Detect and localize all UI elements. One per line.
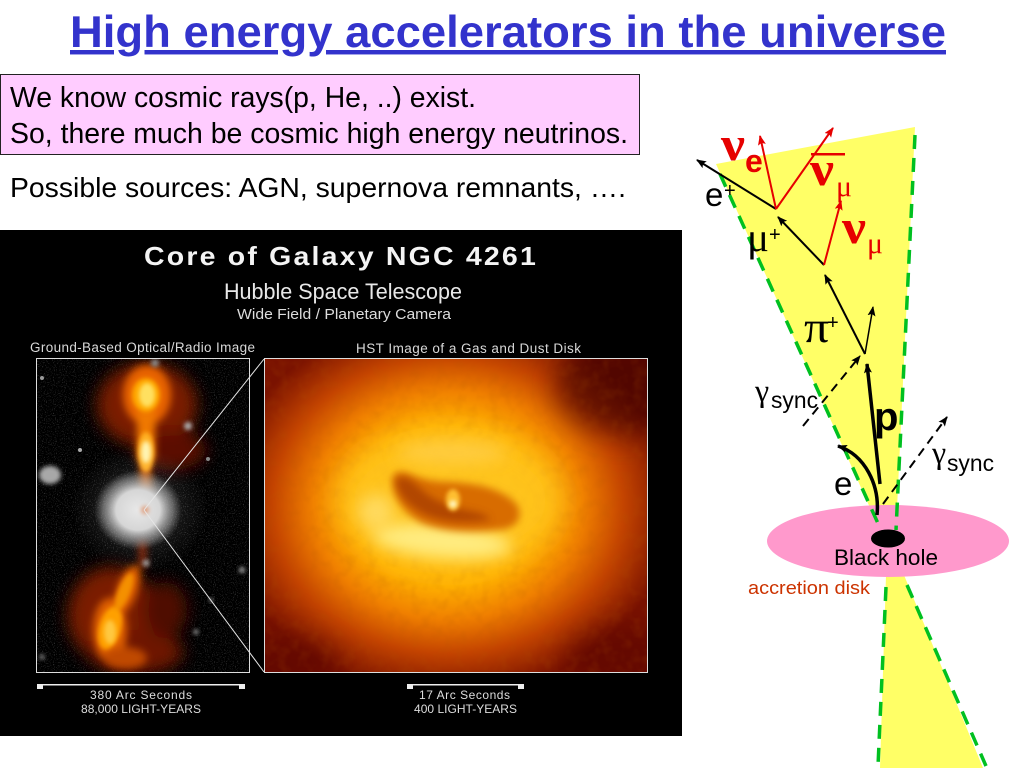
label: muon neutrino	[841, 201, 883, 260]
arrow: muon	[778, 217, 824, 265]
arrow: anti muon neutrino	[776, 128, 833, 209]
arrow: gamma sync left	[803, 356, 860, 426]
left panel caption: Ground-Based Optical/Radio Image	[30, 340, 255, 355]
image heading: Core of Galaxy NGC 4261	[144, 241, 538, 271]
label: anti muon neutrino: ν	[809, 143, 834, 196]
title: High energy accelerators in the universe	[70, 8, 946, 57]
arrow: secondary	[865, 307, 873, 354]
label: muon: +	[769, 224, 781, 246]
label: electron neutrino: ν	[720, 118, 745, 171]
label: muon neutrino: ν	[841, 201, 866, 254]
upper jet cone	[716, 127, 915, 530]
scale bar: left	[37, 684, 245, 716]
zoom lines	[144, 359, 264, 672]
panel: NGC 4261 image	[0, 230, 695, 736]
label: gamma sync left	[754, 372, 818, 413]
arrow: proton	[867, 364, 880, 484]
arrow: muon neutrino	[824, 201, 841, 265]
label: anti muon neutrino	[809, 143, 852, 203]
scale bar: right	[407, 684, 524, 716]
image subheading: Hubble Space Telescope	[224, 279, 462, 304]
callout: cosmic rays statement: So, there much be cosmic high energy neutrinos.	[10, 118, 628, 150]
label: gamma sync right: γ	[931, 434, 946, 470]
lower jet cone	[880, 575, 983, 768]
label: electron neutrino	[720, 118, 763, 179]
label: electron neutrino: e	[745, 143, 763, 179]
accretion disk label: accretion disk	[748, 577, 871, 598]
black hole label: Black hole	[834, 545, 938, 570]
scale bar: right: 17 Arc Seconds	[419, 688, 510, 702]
right panel caption: HST Image of a Gas and Dust Disk	[356, 341, 581, 356]
label: gamma sync left: sync	[771, 387, 818, 413]
label: pion	[804, 303, 839, 352]
callout: cosmic rays statement: We know cosmic rays(p, He, ..) exist.	[10, 82, 476, 114]
arrow: positron	[697, 160, 776, 209]
accretion disk	[767, 505, 1009, 577]
callout: cosmic rays statement	[0, 74, 640, 154]
label: pion: +	[827, 312, 839, 334]
label: positron	[705, 176, 736, 213]
diagram: jet from black hole	[697, 118, 1009, 768]
scale bar: left: 88,000 LIGHT-YEARS	[81, 702, 201, 716]
black hole	[871, 530, 905, 548]
image camera label: Wide Field / Planetary Camera	[237, 306, 452, 323]
label: muon: μ	[747, 215, 769, 260]
label: gamma sync right	[931, 434, 994, 476]
label: proton: p	[874, 395, 898, 439]
arrow: pion	[825, 275, 865, 354]
label: positron: +	[724, 180, 736, 202]
label: muon neutrino: μ	[867, 227, 883, 260]
label: electron: e	[834, 465, 852, 502]
label: positron: e	[705, 176, 723, 213]
right panel frame	[264, 358, 648, 672]
scale bar: right: 400 LIGHT-YEARS	[414, 702, 517, 716]
left panel frame	[36, 358, 250, 672]
text: possible sources: Possible sources: AGN, supernova remnants, ….	[10, 172, 626, 203]
label: gamma sync left: γ	[754, 372, 769, 408]
label: pion: π	[804, 303, 829, 352]
label: muon	[747, 215, 781, 260]
left panel: radio jets over optical galaxy	[37, 359, 249, 674]
label: gamma sync right: sync	[947, 450, 994, 476]
arrow: electron	[838, 446, 877, 515]
jet boundaries	[720, 135, 986, 766]
right panel: gas and dust disk	[265, 359, 647, 672]
scale bar: left: 380 Arc Seconds	[90, 688, 192, 702]
arrow: gamma sync right	[883, 417, 947, 504]
arrow: electron neutrino	[760, 136, 776, 209]
label: anti muon neutrino: μ	[836, 170, 852, 203]
